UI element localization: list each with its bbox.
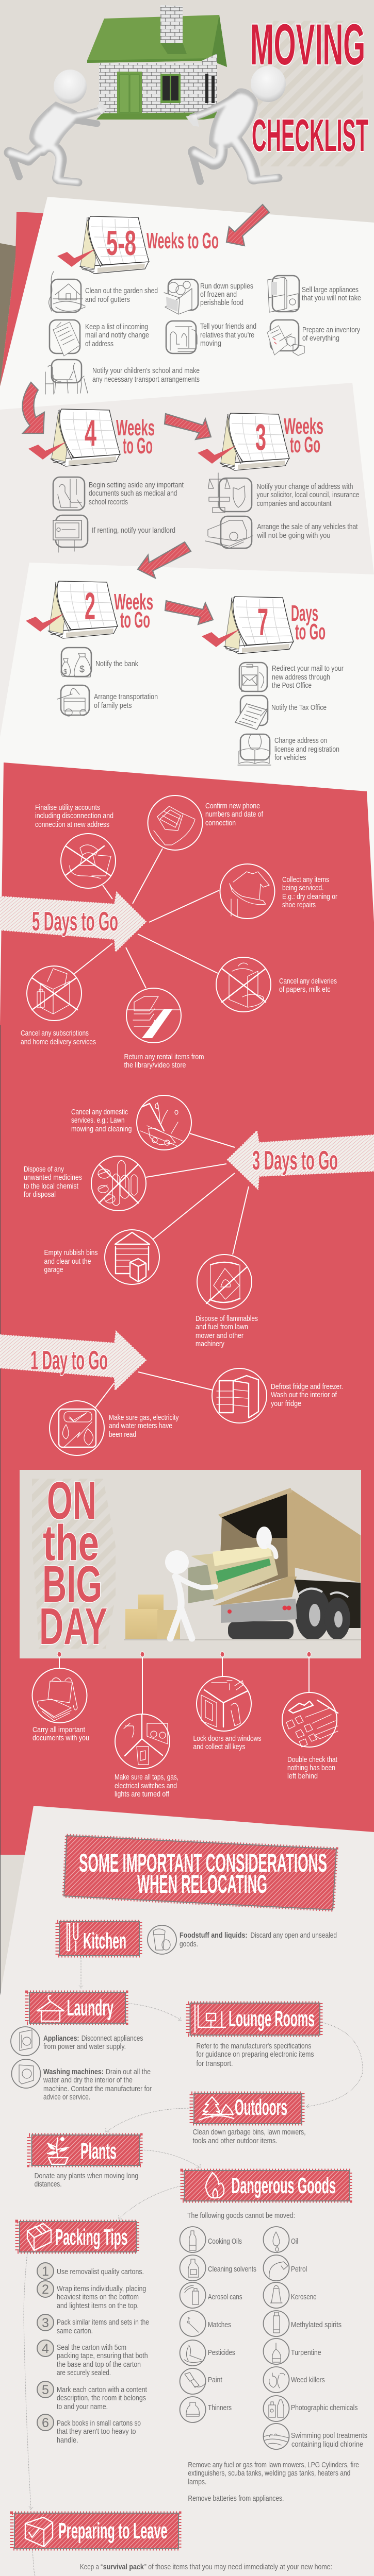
tip 3: Pack similar items and sets in the xyxy=(57,2318,149,2327)
illustration: removal truck xyxy=(124,1488,361,1640)
heading banner: considerations xyxy=(64,1836,336,1910)
text: outdoors: Clean down garbage bins, lawn mowers, xyxy=(193,2128,306,2137)
checklist item: mail redirect: Redirect your mail to your xyxy=(272,665,344,673)
tip 6: that they aren't too heavy to xyxy=(57,2428,136,2436)
item: double check: left behind xyxy=(287,1772,318,1781)
heading: 4 weeks to go: 4 xyxy=(85,413,96,454)
title xyxy=(250,12,368,161)
item: domestic services: Cancel any domestic xyxy=(71,1108,128,1116)
tip 5: Mark each carton with a content xyxy=(57,2386,147,2394)
item: clear garage: and clear out the xyxy=(44,1258,91,1266)
item: cancel subscriptions: Cancel any subscriptions xyxy=(21,1029,89,1038)
label: plants: Plants xyxy=(80,2139,117,2164)
item: methylated spirits: Methylated spirits xyxy=(291,2321,342,2329)
heading: 7 days to go: Days xyxy=(291,601,318,626)
item: washing machines: Drain out all the xyxy=(106,2068,151,2076)
checklist item: bank: $ xyxy=(79,664,85,674)
item: thinners: Thinners xyxy=(208,2404,232,2412)
tip 4: the base and top of the carton xyxy=(57,2361,141,2369)
checklist item: vehicles xyxy=(205,516,358,548)
arrow: right to 7 days xyxy=(165,601,213,624)
checklist item: inventory xyxy=(267,320,361,355)
tip 5: to and your name. xyxy=(57,2403,108,2411)
panel: red days section xyxy=(0,762,374,1855)
heading: on the big day: DAY xyxy=(39,1598,107,1655)
arrow: down-left to 2 weeks xyxy=(138,542,191,578)
tip 1: 1 xyxy=(42,2264,49,2279)
heading: 2 weeks to go: Weeks xyxy=(114,589,153,615)
item: new phone: connection xyxy=(205,819,236,827)
item: defrost fridge: Wash out the interior of xyxy=(271,1391,337,1399)
item: return rentals: the library/video store xyxy=(124,1061,186,1070)
heading: 5-8 weeks to go: Weeks to Go xyxy=(147,228,219,253)
arrow: packing tips to preparing to leave xyxy=(24,2252,34,2510)
item: collect services: Collect any items xyxy=(282,876,329,884)
item: collect services: shoe repairs xyxy=(282,901,316,909)
item: meters read: and water meters have xyxy=(109,1422,172,1430)
checklist item: vehicles: will not be going with you xyxy=(257,532,330,540)
heading: 2 weeks to go: 2 xyxy=(85,585,95,628)
text: dangerous goods notes: Remove batteries from appliances. xyxy=(188,2495,284,2503)
checklist item: garden shed: Clean out the garden shed xyxy=(85,287,158,295)
checklist item: licence: for vehicles xyxy=(274,754,306,762)
item: kerosene xyxy=(263,2282,317,2308)
heading: 5-8 weeks to go xyxy=(57,216,219,274)
panel: on the big day xyxy=(20,1470,361,1658)
tip 4: are securely sealed. xyxy=(57,2369,111,2377)
checklist item: landlord: If renting, notify your landlord xyxy=(92,527,175,535)
item: clear garage: Empty rubbish bins xyxy=(44,1249,98,1257)
tip 2: heaviest items on the bottom xyxy=(57,2293,139,2301)
item: appliances: from power and water supply. xyxy=(43,2043,126,2051)
item: return rentals xyxy=(124,988,204,1070)
tip 4: 4 xyxy=(42,2342,49,2356)
tip 5 xyxy=(37,2381,147,2411)
heading: 7 days to go xyxy=(202,597,326,654)
heading: on the big day: ON xyxy=(47,1471,96,1530)
heading: on the big day xyxy=(39,1471,107,1655)
label: packing tips xyxy=(17,2222,137,2252)
heading: 2 weeks to go xyxy=(26,581,153,638)
text: goods intro: The following goods cannot be moved: xyxy=(187,2212,295,2220)
arrow: dangerous goods to packing tips xyxy=(119,2185,183,2219)
checklist item: bank: $ xyxy=(63,668,68,675)
label: kitchen xyxy=(57,1922,140,1956)
checklist item: garden shed xyxy=(49,272,158,312)
figure: right mover xyxy=(186,66,286,181)
list: packing tips xyxy=(37,2263,149,2445)
tip 6: 6 xyxy=(42,2416,49,2430)
icon: door xyxy=(117,72,142,113)
label: preparing to leave xyxy=(12,2513,180,2549)
item: washing machines: machine. Contact the manufacturer for xyxy=(43,2085,152,2093)
item: foodstuff: Discard any open and unsealed xyxy=(251,1931,337,1940)
heading: 3 weeks to go: to Go xyxy=(290,432,320,457)
icon: window xyxy=(160,74,215,103)
item: aerosol cans: Aerosol cans xyxy=(208,2293,242,2301)
heading: on the big day: BIG xyxy=(42,1555,102,1613)
label: preparing to leave: Preparing to Leave xyxy=(58,2518,168,2544)
item: defrost fridge xyxy=(212,1368,343,1423)
tip 2: 2 xyxy=(42,2282,49,2297)
checklist item: inventory: Prepare an inventory xyxy=(302,326,361,334)
item: dispose of medicines: unwanted medicines xyxy=(24,1174,82,1182)
item: weed killers: Weed killers xyxy=(291,2376,325,2384)
item: flammables: mower and other xyxy=(196,1332,243,1340)
connector lines xyxy=(146,1133,249,1255)
title scribble xyxy=(254,21,363,166)
item: new phone: Confirm new phone xyxy=(205,802,260,810)
connector lines xyxy=(74,849,219,988)
item: carry documents xyxy=(32,1668,89,1742)
checklist item: documents: documents such as medical and xyxy=(89,489,177,498)
item: photographic chemicals xyxy=(263,2396,358,2421)
label: outdoors: Outdoors xyxy=(235,2095,287,2120)
item: dispose of medicines: Dispose of any xyxy=(24,1165,64,1174)
text: survival pack intro: survival pack xyxy=(103,2563,144,2571)
checklist item: mail redirect xyxy=(239,663,344,691)
item: petrol xyxy=(263,2255,307,2281)
tip 2: and lightest items on the top. xyxy=(57,2302,139,2310)
heading: 3 weeks to go xyxy=(198,413,323,470)
heading: 4 weeks to go: to Go xyxy=(123,433,153,459)
item: turpentine xyxy=(263,2338,321,2364)
checklist item: documents: Begin setting aside any important xyxy=(89,481,184,489)
arrow: lounge to outdoors xyxy=(306,2022,363,2108)
checklist item: licence: Change address on xyxy=(274,737,327,745)
panel: 2 weeks and 7 days xyxy=(0,563,374,1030)
tip 5: 5 xyxy=(42,2383,49,2397)
item: return rentals: Return any rental items from xyxy=(124,1053,204,1061)
tip 6 xyxy=(37,2414,141,2445)
heading: 7 days to go: 7 xyxy=(257,601,268,643)
panel: red corner xyxy=(0,212,46,392)
icon: roof xyxy=(87,5,227,67)
tip 4 xyxy=(37,2340,148,2377)
item: finalise utilities: including disconnection and xyxy=(35,812,113,820)
label: laundry: Laundry xyxy=(67,1995,113,2021)
heading arrow: 3 days to go xyxy=(227,1131,374,1189)
item: taps and switches xyxy=(115,1714,178,1799)
checklist item: mail list xyxy=(50,320,149,356)
item: cooking oils: Cooking Oils xyxy=(208,2238,242,2246)
arrow: preparing to leave to delivery xyxy=(32,2549,68,2576)
tip 3 xyxy=(37,2314,149,2335)
text: survival pack intro xyxy=(80,2563,332,2571)
checklist item: school: any necessary transport arrangements xyxy=(92,376,200,384)
checklist item: frozen food: perishable food xyxy=(200,299,243,307)
item: dispose of medicines: to the local chemist xyxy=(24,1182,78,1191)
checklist item: mail list: of address xyxy=(85,340,113,348)
item: appliances: Disconnect appliances xyxy=(82,2035,143,2043)
item: foodstuff: Foodstuff and liquids: xyxy=(180,1931,248,1940)
heading: 7 days to go: to Go xyxy=(295,619,326,645)
item: foodstuff xyxy=(148,1925,337,1954)
scribble behind heading xyxy=(32,1479,116,1649)
item: meters read: Make sure gas, electricity xyxy=(109,1414,179,1422)
checklist item: tax xyxy=(235,696,327,730)
item: cleaning solvents xyxy=(180,2255,256,2281)
text: plants xyxy=(35,2172,138,2189)
heading: 2 weeks to go: to Go xyxy=(120,607,150,633)
item: lock doors xyxy=(193,1676,261,1751)
arrow: curved down to 4 weeks xyxy=(22,382,44,433)
item: cancel deliveries xyxy=(216,957,337,1012)
item: photographic chemicals: Photographic chemicals xyxy=(291,2404,358,2412)
tip 5: description, the room it belongs xyxy=(57,2394,146,2402)
panel: tan corner xyxy=(0,243,17,386)
checklist item: garden shed: and roof gutters xyxy=(85,296,130,304)
item: washing machines: advice or service. xyxy=(43,2093,90,2102)
tip 2 xyxy=(37,2281,146,2310)
item: defrost fridge: Defrost fridge and freezer. xyxy=(271,1383,343,1391)
item: lock doors: Lock doors and windows xyxy=(193,1735,261,1743)
connector lines xyxy=(95,1372,213,1408)
item: washing machines: water and dry the interior of the xyxy=(43,2076,133,2084)
checklist item: school: Notify your children's school and make xyxy=(92,367,200,375)
item: carry documents: Carry all important xyxy=(32,1726,85,1734)
item: double check: nothing has been xyxy=(287,1764,335,1772)
item: collect services xyxy=(220,864,337,919)
tip 6: handle. xyxy=(57,2436,78,2445)
item: paint xyxy=(180,2368,222,2394)
text: outdoors xyxy=(193,2128,306,2145)
item: meters read xyxy=(50,1401,179,1455)
item: matches xyxy=(180,2311,231,2336)
label: dangerous goods xyxy=(182,2171,350,2201)
tip 3: same carton. xyxy=(57,2327,93,2335)
item: cancel subscriptions: and home delivery services xyxy=(21,1038,96,1046)
heading: 4 weeks to go: Weeks xyxy=(116,415,155,440)
item: collect services: E.g.: dry cleaning or xyxy=(282,893,337,901)
item: swimming pool treatments: containing liquid chlorine xyxy=(291,2441,363,2449)
item: cooking oils xyxy=(180,2227,242,2252)
tip 1 xyxy=(37,2263,144,2279)
item: taps and switches: lights are turned off xyxy=(115,1790,170,1799)
item: taps and switches: electrical switches and xyxy=(115,1782,177,1790)
item: flammables: Dispose of flammables xyxy=(196,1315,258,1323)
checklist item: appliances: that you will not take xyxy=(302,294,361,302)
panel: 5-8 weeks xyxy=(0,197,374,618)
text: dangerous goods notes: lamps. xyxy=(188,2478,206,2486)
checklist item: mail list: Keep a list of incoming xyxy=(85,323,148,331)
item: finalise utilities: connection at new address xyxy=(35,821,109,829)
item: pesticides xyxy=(180,2340,235,2366)
heading: 4 weeks to go xyxy=(28,409,155,466)
checklist item: inventory: of everything xyxy=(302,334,339,343)
arrow: outdoors to plants xyxy=(106,2108,191,2132)
checklist item: licence xyxy=(238,734,339,765)
item: domestic services: mowing and cleaning xyxy=(71,1125,132,1133)
figure: left mover xyxy=(9,70,107,182)
icon: chimney xyxy=(160,5,183,43)
list: dangerous goods xyxy=(180,2227,367,2449)
item: swimming pool treatments xyxy=(263,2424,367,2449)
item: clear garage: garage xyxy=(44,1266,63,1274)
tip 2: Wrap items individually, placing xyxy=(57,2285,146,2293)
item: appliances xyxy=(11,2027,143,2056)
checklist item: mail redirect: the Post Office xyxy=(272,682,312,690)
icon: house walls xyxy=(96,54,217,120)
arrow: plants to dangerous goods xyxy=(141,2150,200,2167)
arrow: down-left to checklist xyxy=(226,205,269,246)
item: collect services: being serviced. xyxy=(282,884,324,892)
item: oil: Oil xyxy=(291,2238,298,2246)
checklist item: friends: moving xyxy=(200,340,221,348)
item: appliances: Appliances: xyxy=(43,2035,79,2043)
item: taps and switches: Make sure all taps, gas, xyxy=(115,1773,178,1782)
heading: 5-8 weeks to go: 5-8 xyxy=(106,224,136,263)
item: aerosol cans xyxy=(180,2282,242,2308)
item: cancel deliveries: of papers, milk etc xyxy=(279,986,330,994)
arrow: right to 3 weeks xyxy=(165,414,211,439)
text: survival pack intro: ” of those items that you may need immediately at your new home: xyxy=(144,2563,332,2571)
label: plants xyxy=(29,2135,141,2165)
item: double check: Double check that xyxy=(287,1756,337,1764)
arrow: kitchen to laundry xyxy=(79,1957,83,1988)
checklist item: frozen food: Run down supplies xyxy=(200,282,253,291)
checklist item: friends: Tell your friends and xyxy=(200,323,256,331)
item: foodstuff: goods. xyxy=(180,1940,198,1948)
heading: 3 weeks to go: Weeks xyxy=(284,414,323,439)
item: methylated spirits xyxy=(263,2311,342,2336)
item: weed killers xyxy=(263,2367,325,2393)
tip 3: 3 xyxy=(42,2316,49,2330)
label: laundry xyxy=(27,1992,126,2023)
checklist item: tax: Notify the Tax Office xyxy=(271,704,327,712)
checklist item: solicitor: companies and accountant xyxy=(257,500,331,508)
item: new phone: numbers and date of xyxy=(205,810,264,819)
item: pesticides: Pesticides xyxy=(208,2349,235,2357)
item: dispose of medicines: for disposal xyxy=(24,1191,56,1199)
item: thinners xyxy=(180,2397,232,2422)
item: paint: Paint xyxy=(208,2376,222,2384)
item: oil xyxy=(263,2227,298,2252)
checklist item: bank xyxy=(61,648,139,677)
item: finalise utilities xyxy=(35,804,116,888)
checklist item: frozen food: of frozen and xyxy=(200,291,237,299)
checklist item: solicitor: Notify your change of address with xyxy=(257,483,353,491)
checklist item: appliances: Sell large appliances xyxy=(302,286,359,294)
checklist item: frozen food xyxy=(164,279,253,314)
pins and connector lines xyxy=(57,1652,311,1714)
text: lounge rooms: for transport. xyxy=(196,2060,233,2068)
checklist item: pets: of family pets xyxy=(94,702,132,710)
checklist item: mail list: mail and notify change xyxy=(85,331,149,340)
heading: on the big day: the xyxy=(43,1515,99,1571)
item: double check xyxy=(282,1692,338,1781)
item: cleaning solvents: Cleaning solvents xyxy=(208,2265,256,2274)
text: dangerous goods notes xyxy=(188,2461,359,2503)
item: defrost fridge: your fridge xyxy=(271,1400,301,1408)
item: petrol: Petrol xyxy=(291,2265,307,2274)
text: plants: distances. xyxy=(35,2180,62,2189)
item: dispose of medicines xyxy=(24,1156,146,1211)
item: domestic services xyxy=(71,1095,191,1150)
text: lounge rooms xyxy=(196,2042,314,2068)
label: packing tips: Packing Tips xyxy=(55,2225,127,2250)
checklist item: documents xyxy=(53,477,184,510)
panel: considerations xyxy=(0,1806,374,2576)
item: cancel subscriptions xyxy=(21,966,96,1046)
item: flammables: and fuel from lawn xyxy=(196,1323,248,1331)
item: clear garage xyxy=(44,1230,159,1284)
item: meters read: been read xyxy=(109,1431,136,1439)
checklist item: bank: Notify the bank xyxy=(95,660,139,668)
item: washing machines: Washing machines: xyxy=(43,2068,104,2076)
illustration: sofa and movers xyxy=(165,1527,278,1638)
item: flammables xyxy=(196,1255,258,1348)
tip 1: Use removalist quality cartons. xyxy=(57,2268,144,2276)
checklist item: documents: school records xyxy=(89,498,128,506)
checklist item: appliances xyxy=(268,276,361,312)
item: domestic services: services. e.g.: Lawn xyxy=(71,1116,125,1125)
label: kitchen: Kitchen xyxy=(83,1928,126,1954)
checklist item: solicitor xyxy=(208,473,359,513)
checklist item: licence: license and registration xyxy=(274,745,339,754)
heading arrow: 1 day to go xyxy=(0,1331,146,1390)
text: outdoors: tools and other outdoor items. xyxy=(193,2137,278,2145)
panel: 4 and 3 weeks xyxy=(0,383,374,737)
checklist item: friends xyxy=(166,321,256,353)
label: lounge rooms xyxy=(188,2003,321,2035)
item: washing machines xyxy=(11,2059,152,2102)
checklist item: mail redirect: new address through xyxy=(272,673,330,682)
item: matches: Matches xyxy=(208,2321,231,2329)
tip 6: Pack books in small cartons so xyxy=(57,2419,141,2428)
text: lounge rooms: for guidance on preparing electronic items xyxy=(196,2050,314,2059)
checklist item: school xyxy=(45,360,200,394)
item: kerosene: Kerosene xyxy=(291,2293,317,2301)
item: new phone xyxy=(148,795,264,850)
item: flammables: machinery xyxy=(196,1340,225,1348)
left edge line xyxy=(0,1025,1,1996)
item: finalise utilities: Finalise utility accounts xyxy=(35,804,100,812)
heading arrow: 5 days to go xyxy=(0,892,146,952)
heading arrow: 1 day to go: 1 Day to Go xyxy=(30,1346,108,1376)
heading: 3 weeks to go: 3 xyxy=(255,417,266,458)
label: outdoors xyxy=(191,2093,303,2124)
text: lounge rooms: Refer to the manufacturer's specifications xyxy=(196,2042,312,2050)
item: turpentine: Turpentine xyxy=(291,2349,321,2357)
item: lock doors: and collect all keys xyxy=(193,1743,246,1751)
tip 4: packing tape, ensuring that both xyxy=(57,2352,148,2360)
item: cancel deliveries: Cancel any deliveries xyxy=(279,977,337,986)
text: plants: Donate any plants when moving long xyxy=(35,2172,138,2180)
checklist item: friends: relatives that you're xyxy=(200,331,254,340)
hero illustration: house and figures xyxy=(9,5,286,182)
text: survival pack intro: Keep a “ xyxy=(80,2563,103,2571)
checklist item: landlord xyxy=(53,515,175,552)
checklist item: pets xyxy=(57,685,158,716)
item: carry documents: documents with you xyxy=(32,1734,89,1742)
illustration: cartons xyxy=(125,1595,180,1639)
arrow: laundry to lounge xyxy=(126,2003,181,2021)
heading arrow: 5 days to go: 5 Days to Go xyxy=(32,907,118,937)
checklist item: pets: Arrange transportation xyxy=(94,693,158,701)
tip 4: Seal the carton with 5cm xyxy=(57,2344,126,2352)
